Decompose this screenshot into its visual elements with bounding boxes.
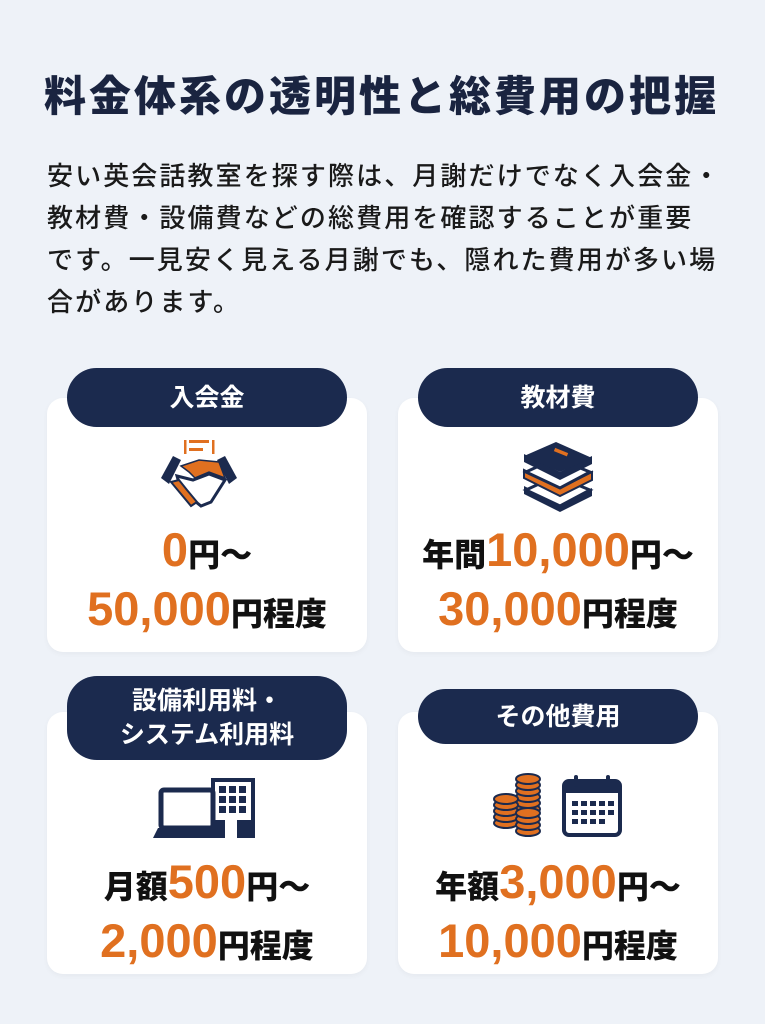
pill heading bbox=[67, 368, 347, 427]
title: 料金体系の透明性と総費用の把握 bbox=[44, 73, 719, 120]
icon: books bbox=[522, 442, 594, 512]
price text: 2,000円程度 bbox=[100, 914, 314, 967]
price text: 30,000円程度 bbox=[438, 582, 678, 635]
panel: facility/system fee bbox=[47, 676, 367, 974]
pill heading: 設備利用料・ bbox=[132, 687, 282, 715]
pill heading: その他費用 bbox=[495, 702, 620, 730]
icon: coins and calendar bbox=[493, 773, 622, 837]
price text bbox=[435, 855, 681, 967]
pill heading: 入会金 bbox=[169, 384, 244, 412]
intro paragraph: 合があります。 bbox=[47, 287, 241, 317]
pill heading: 教材費 bbox=[520, 384, 596, 412]
price text: 年間10,000円～ bbox=[422, 523, 694, 576]
icon: laptop and building bbox=[153, 778, 255, 838]
price text: 0円～ bbox=[162, 523, 252, 576]
intro paragraph: です。一見安く見える月謝でも、隠れた費用が多い場 bbox=[47, 245, 717, 275]
intro paragraph bbox=[47, 161, 721, 317]
pill heading bbox=[67, 676, 347, 760]
price text: 10,000円程度 bbox=[438, 914, 678, 967]
price text bbox=[100, 855, 314, 967]
panel: entrance fee bbox=[47, 368, 367, 652]
card background bbox=[47, 398, 367, 652]
icon: handshake bbox=[161, 440, 237, 508]
price text: 月額500円～ bbox=[104, 855, 310, 908]
pill heading: システム利用料 bbox=[120, 721, 294, 749]
card background bbox=[398, 712, 718, 974]
card background bbox=[47, 712, 367, 974]
price text: 50,000円程度 bbox=[87, 582, 327, 635]
price text bbox=[422, 523, 694, 635]
intro paragraph: 安い英会話教室を探す際は、月謝だけでなく入会金・ bbox=[47, 161, 721, 191]
price text bbox=[87, 523, 327, 635]
price text: 年額3,000円～ bbox=[435, 855, 681, 908]
pill heading bbox=[418, 368, 698, 427]
intro paragraph: 教材費・設備費などの総費用を確認することが重要 bbox=[47, 203, 693, 233]
panel: other fees bbox=[398, 689, 718, 974]
panel: materials fee bbox=[398, 368, 718, 652]
card background bbox=[398, 398, 718, 652]
pill heading bbox=[418, 689, 698, 744]
